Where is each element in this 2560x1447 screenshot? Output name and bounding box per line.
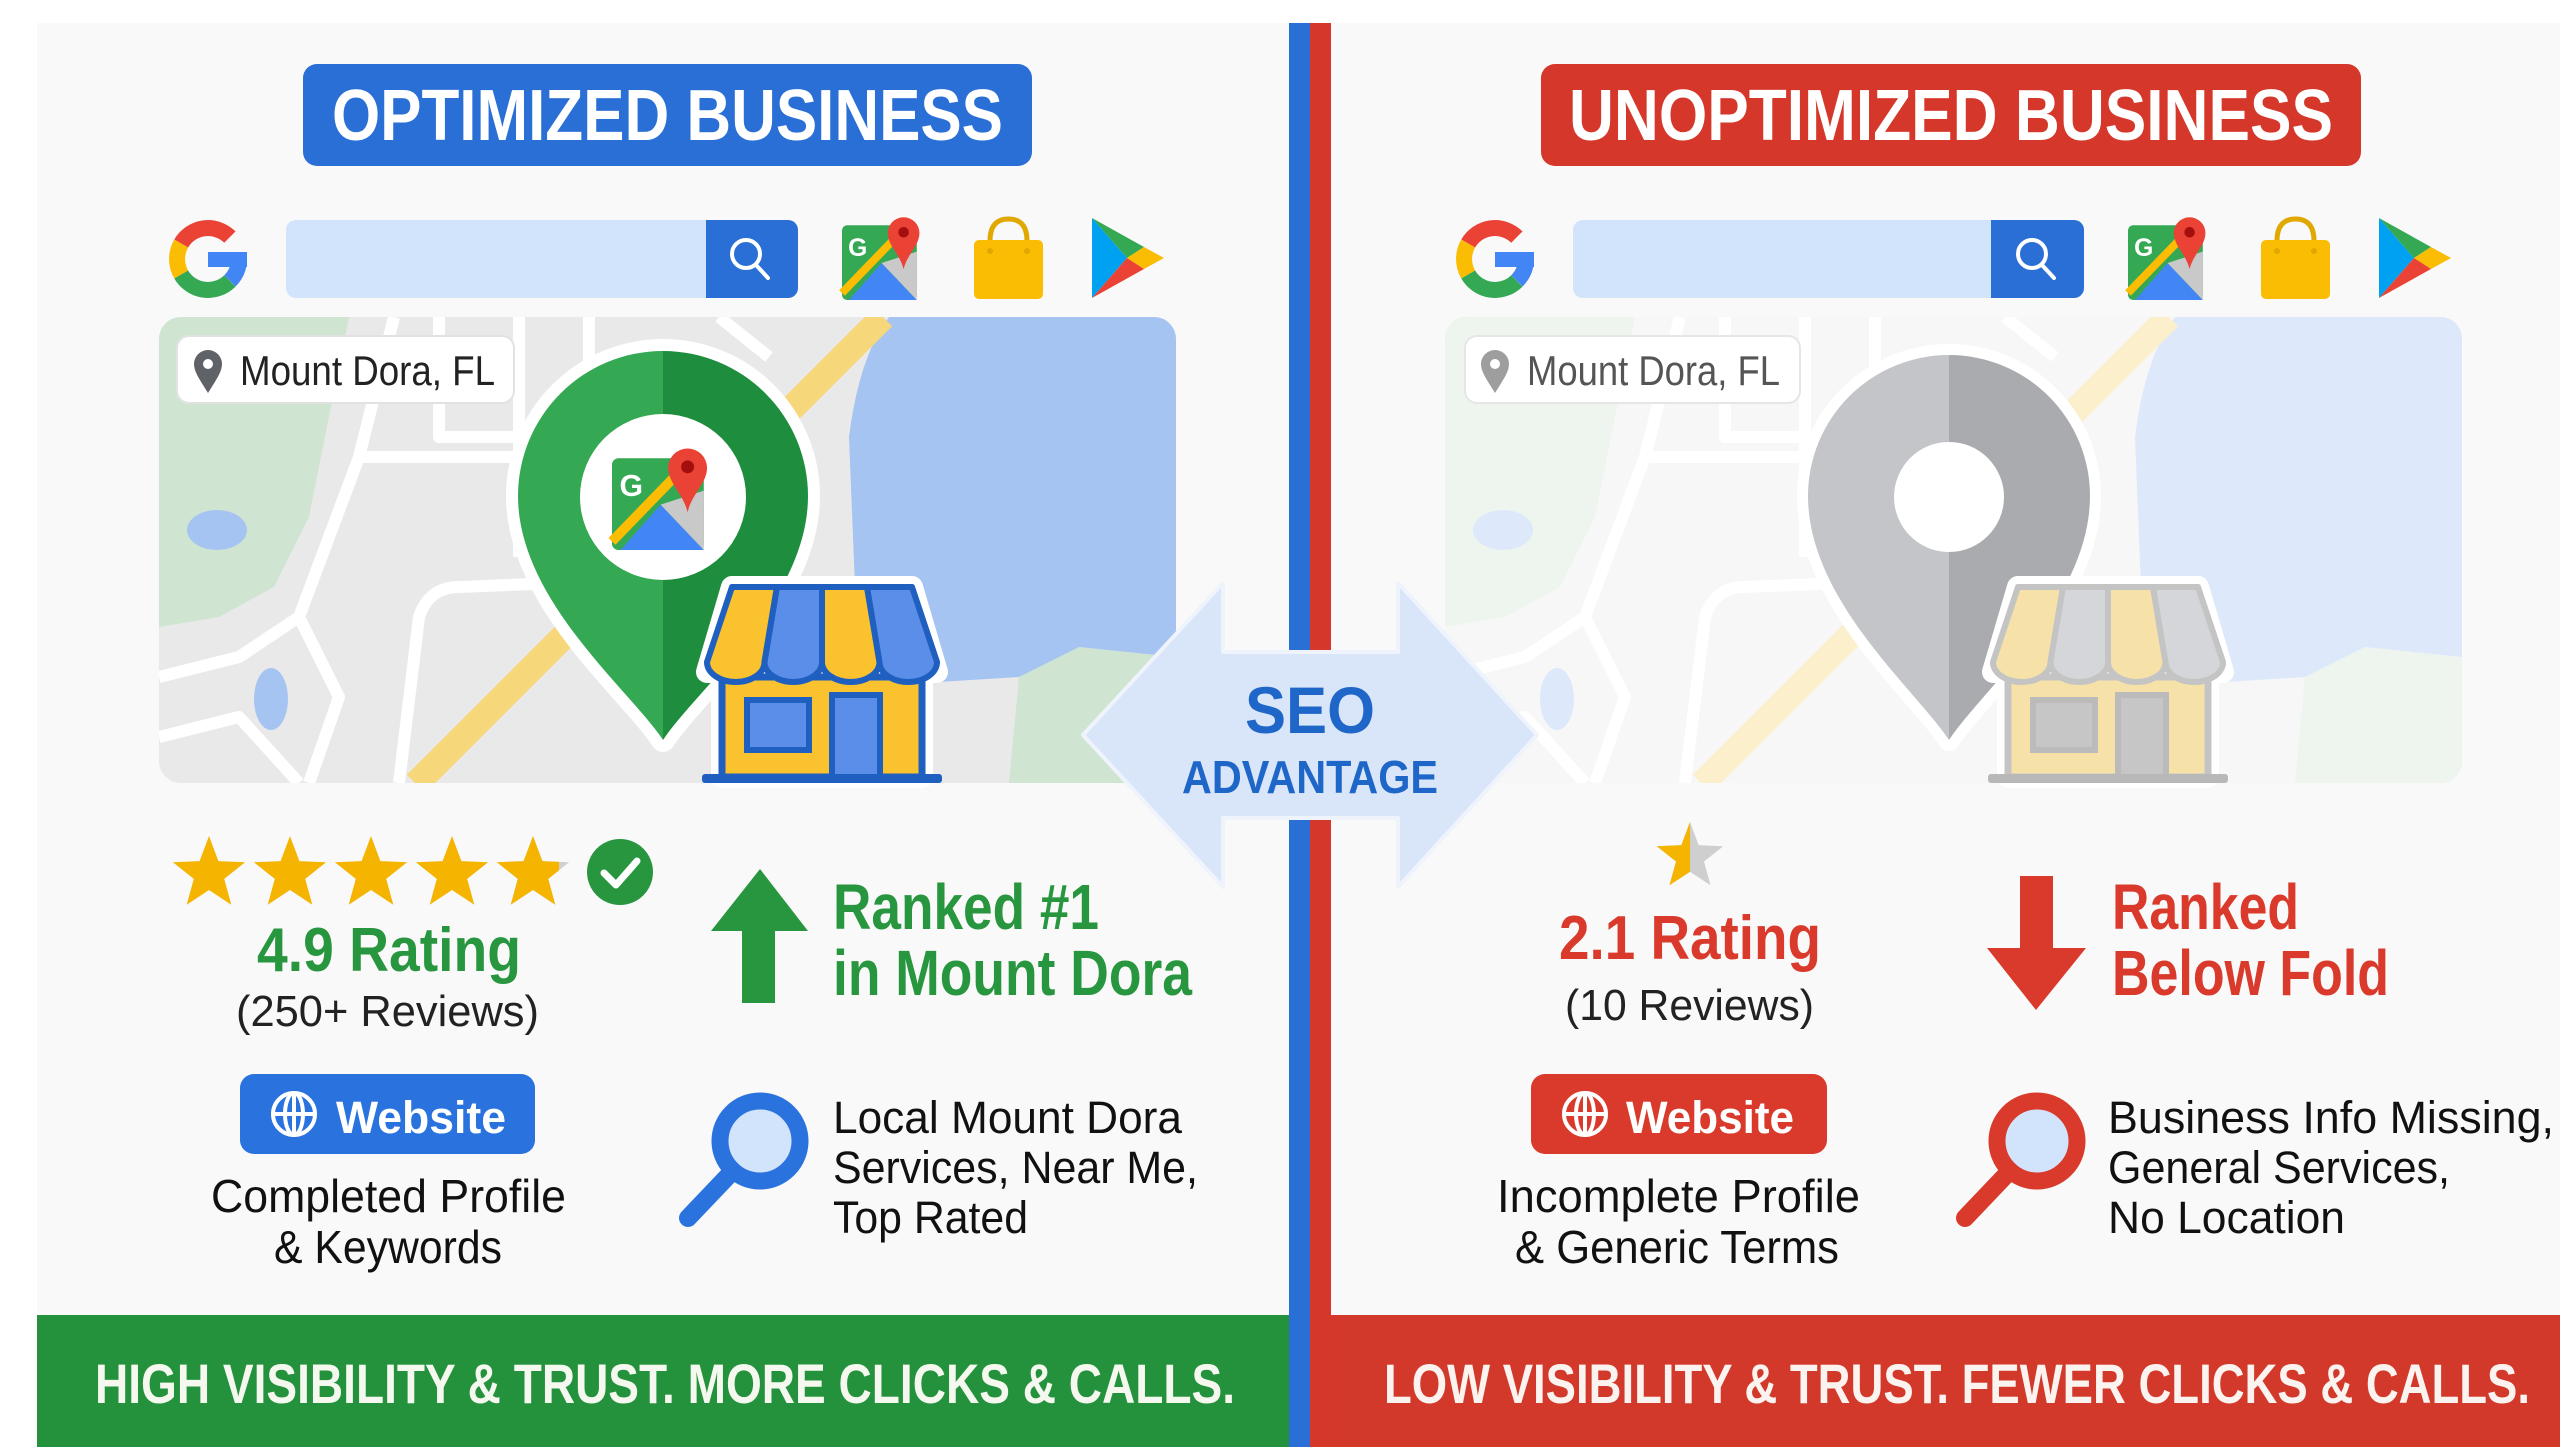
footer: high visibility: HIGH VISIBILITY & TRUST. MORE CLICKS & CALLS. <box>95 1352 1235 1415</box>
title: optimized business: OPTIMIZED BUSINESS <box>332 76 1003 156</box>
divider: blue and red lines <box>1289 23 1331 1447</box>
icon: faded storefront <box>1988 587 2228 783</box>
website button: complete: Completed Profile <box>211 1170 566 1222</box>
rating: 2.1 half star: 2.1 Rating <box>1559 904 1821 973</box>
keywords: generic search: General Services, <box>2108 1142 2450 1193</box>
rating: 2.1 half star: (10 Reviews) <box>1565 981 1814 1030</box>
icon: green location pin <box>518 351 808 740</box>
icon: google maps <box>2128 217 2205 300</box>
arrow: SEO advantage: ADVANTAGE <box>1182 751 1438 803</box>
title: optimized business <box>303 64 1032 166</box>
search bar <box>286 220 798 298</box>
keywords: generic search <box>1965 1092 2554 1243</box>
footer: high visibility <box>37 1315 1289 1447</box>
location chip: Mount Dora, FL <box>1527 347 1780 394</box>
panel: optimized business <box>37 23 1289 1447</box>
arrow: ranked down <box>1987 871 2389 1010</box>
website button: incomplete: Incomplete Profile <box>1497 1170 1860 1222</box>
arrow: ranked up: Ranked #1 <box>833 871 1099 943</box>
location chip <box>1465 336 1800 403</box>
website button: complete: & Keywords <box>274 1221 502 1273</box>
panel: unoptimized business <box>1331 23 2560 1447</box>
map: unoptimized (faded) <box>1445 317 2462 784</box>
arrow: ranked up <box>711 869 1192 1009</box>
website button: complete: Website <box>336 1092 506 1143</box>
icon: shopping bag <box>974 219 1043 299</box>
keywords: generic search: No Location <box>2108 1192 2345 1243</box>
rating: 4.9 stars: (250+ Reviews) <box>236 987 539 1036</box>
keywords: local search: Local Mount Dora <box>833 1092 1183 1143</box>
location chip: Mount Dora, FL <box>240 347 495 394</box>
arrow: SEO advantage <box>1083 583 1537 887</box>
map: optimized <box>159 317 1176 784</box>
website button: complete <box>211 1074 566 1273</box>
icon: gray location pin <box>1808 355 2090 740</box>
keywords: local search: Services, Near Me, <box>833 1142 1198 1193</box>
icon: play store <box>1092 218 1164 298</box>
search bar <box>1573 220 2084 298</box>
website button: incomplete: & Generic Terms <box>1515 1221 1839 1273</box>
arrow: ranked down: Ranked <box>2112 871 2299 943</box>
arrow: ranked up: in Mount Dora <box>833 937 1192 1009</box>
keywords: generic search: Business Info Missing, <box>2108 1092 2554 1143</box>
icon: play store <box>2379 218 2451 298</box>
icon: google G <box>177 228 247 290</box>
footer: low visibility <box>1331 1315 2560 1447</box>
icon: storefront <box>702 587 942 783</box>
website button: incomplete <box>1497 1074 1860 1273</box>
arrow: ranked down: Below Fold <box>2112 937 2389 1009</box>
title: unoptimized business: UNOPTIMIZED BUSINESS <box>1569 76 2333 156</box>
icon: google G <box>1464 228 1534 290</box>
keywords: local search: Top Rated <box>833 1192 1028 1243</box>
rating: 2.1 half star <box>1559 822 1821 1030</box>
arrow: SEO advantage: SEO <box>1245 673 1375 747</box>
rating: 4.9 stars <box>173 836 653 1036</box>
keywords: local search <box>688 1092 1198 1243</box>
icon: verified check <box>587 839 653 905</box>
website button: incomplete: Website <box>1626 1092 1794 1143</box>
rating: 4.9 stars: 4.9 Rating <box>257 916 521 985</box>
icon: google maps <box>842 217 919 300</box>
icon: shopping bag <box>2261 219 2330 299</box>
location chip <box>177 336 514 403</box>
title: unoptimized business <box>1541 64 2361 166</box>
